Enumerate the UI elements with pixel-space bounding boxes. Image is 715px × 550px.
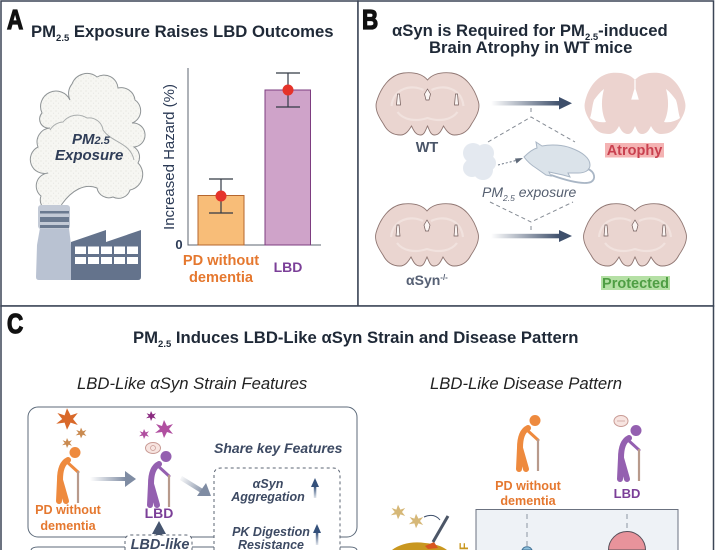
- plot: disease pattern: [476, 510, 678, 550]
- icon: syringe: [433, 516, 448, 542]
- figure: LBD patient right: [620, 425, 642, 481]
- heading C: 2.5: [158, 339, 172, 350]
- figure: PD patient: [59, 447, 80, 503]
- icon: smoke cloud: [30, 74, 145, 211]
- heading: shared key features: Share key Features: [214, 440, 343, 456]
- label: knockout: αSyn: [406, 272, 440, 288]
- brain: protected: [584, 204, 686, 266]
- arrow: LBD up from LBD-like: [152, 521, 166, 537]
- label: αSyn aggregation: [230, 477, 305, 504]
- label: PM2.5 exposure: exposure: [515, 184, 577, 200]
- label: PD without dementia: PD without: [183, 253, 259, 269]
- figure: LBD patient: [150, 451, 172, 507]
- arrow: knockout to protected: [491, 230, 572, 242]
- label: PD without dementia: dementia: [189, 270, 254, 286]
- label: PD without dementia right: [495, 479, 562, 508]
- cloud label: PM2.5: [72, 131, 111, 148]
- panel: C strain and disease pattern: [1, 306, 714, 550]
- brain: atrophy: [585, 73, 685, 134]
- figure: PD patient right: [519, 415, 540, 471]
- heading C: PM: [133, 328, 158, 347]
- arrow: PD to LBD: [90, 471, 136, 487]
- icon: tan aggregates: [391, 505, 423, 528]
- brain: knockout: [376, 204, 478, 266]
- label: knockout: -/-: [440, 273, 448, 282]
- label: LBD right: LBD: [614, 486, 640, 501]
- label: atrophy: Atrophy: [607, 143, 662, 159]
- icon: factory: [36, 205, 141, 280]
- label: PK digestion resistance: PK Digestion: [232, 525, 310, 539]
- y axis label: Increased Hazard (%): [161, 84, 178, 230]
- icon: particulate cloud: [463, 143, 496, 180]
- point: LBD: [608, 532, 646, 550]
- cloud label: Exposure: [55, 147, 123, 164]
- heading A: PM: [31, 22, 56, 41]
- label: LBD: LBD: [145, 505, 173, 521]
- box: shared key features: [214, 468, 340, 550]
- icon: injected mouse brain: [391, 505, 448, 550]
- panel letter B: B: [362, 5, 378, 36]
- label: PM2.5 exposure: 2.5: [502, 193, 515, 203]
- label: PD without dementia: dementia: [40, 519, 97, 533]
- heading B: Brain Atrophy in WT mice: [429, 38, 632, 57]
- axis label: PFF: F: [457, 543, 471, 550]
- icon: mouse: [524, 142, 594, 183]
- label: PK digestion resistance: [232, 525, 310, 550]
- label: αSyn aggregation: Aggregation: [230, 490, 305, 504]
- label: PM2.5 exposure: PM: [482, 184, 503, 200]
- panel letter A: A: [7, 5, 23, 36]
- heading A: 2.5: [56, 33, 70, 44]
- heading B: 2.5: [585, 32, 599, 43]
- heading B: -induced: [598, 21, 668, 40]
- subheading: disease pattern: LBD-Like Disease Pattern: [430, 374, 622, 393]
- label: PD without dementia right: PD without: [495, 479, 562, 493]
- label: PD without dementia: [183, 253, 259, 286]
- panel letter C: C: [7, 309, 23, 340]
- error bars: [209, 73, 300, 213]
- icon: speech bubble: [146, 442, 160, 454]
- bar chart: increased hazard: [161, 68, 321, 286]
- heading A: Exposure Raises LBD Outcomes: [69, 22, 334, 41]
- bar: PD without dementia: [198, 196, 244, 245]
- point: PD without dementia: [522, 547, 532, 550]
- heading C: Induces LBD-Like αSyn Strain and Disease Pattern: [171, 328, 578, 347]
- subheading: strain features: LBD-Like αSyn Strain Features: [77, 374, 307, 393]
- brain: WT: [376, 73, 479, 135]
- panel: B alpha-synuclein requirement: [358, 1, 714, 306]
- icon: speech bubble right: [614, 416, 628, 426]
- label: PD without dementia right: dementia: [500, 494, 557, 508]
- point estimates: [216, 84, 294, 202]
- label: αSyn aggregation: αSyn: [253, 477, 284, 491]
- arrow: injection path: [424, 515, 440, 520]
- axis zero: 0: [175, 237, 183, 252]
- icon: orange aggregates: [56, 408, 86, 448]
- arrow: LBD to shared features: [180, 476, 211, 496]
- arrow: aggregation up: [311, 478, 319, 498]
- arrow: WT to atrophy: [491, 97, 572, 110]
- bar: LBD: [265, 90, 310, 245]
- heading B: αSyn is Required for PM: [392, 21, 585, 40]
- icon: purple aggregates: [139, 411, 173, 439]
- box: strain features: [28, 407, 357, 537]
- label: PD without dementia: PD without: [35, 503, 102, 517]
- box: lower strain panel: [31, 547, 357, 550]
- arrow: digestion resistance up: [313, 524, 321, 545]
- exposure dashed connectors: [488, 108, 575, 231]
- label: protected: Protected: [602, 276, 669, 292]
- label: WT: WT: [416, 140, 438, 156]
- label: PD without dementia: [35, 503, 102, 533]
- label: LBD: LBD: [274, 259, 302, 275]
- heading B: [392, 21, 668, 57]
- cloud label: [55, 131, 123, 164]
- icon: inhalation arrow: [498, 158, 523, 165]
